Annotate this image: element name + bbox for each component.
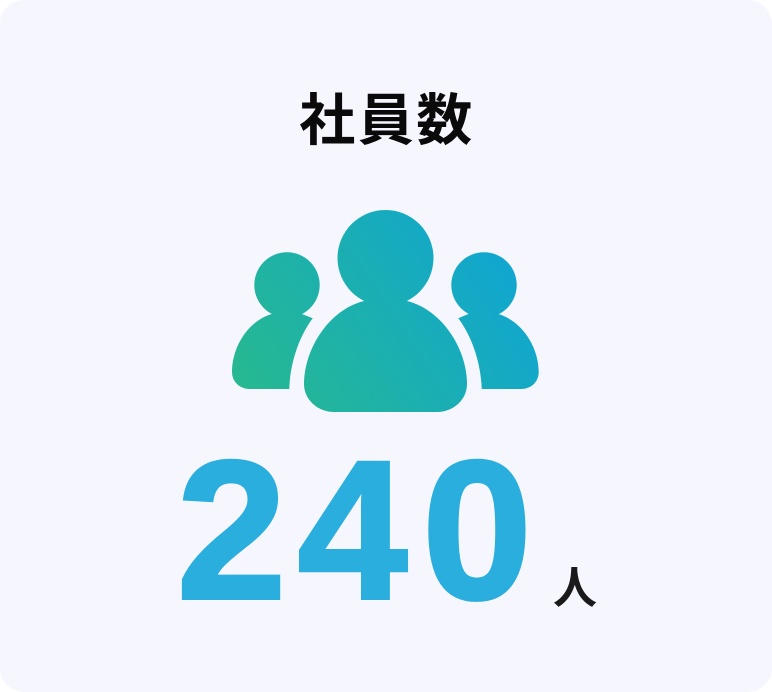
icon: three people [232,210,539,412]
icon: left person [232,252,320,389]
unit: person: 人 [553,564,597,613]
title: 社員数 [299,89,475,152]
number: 240: 240 [176,420,532,640]
icon: center person [304,210,467,412]
icon: right person [451,252,539,389]
